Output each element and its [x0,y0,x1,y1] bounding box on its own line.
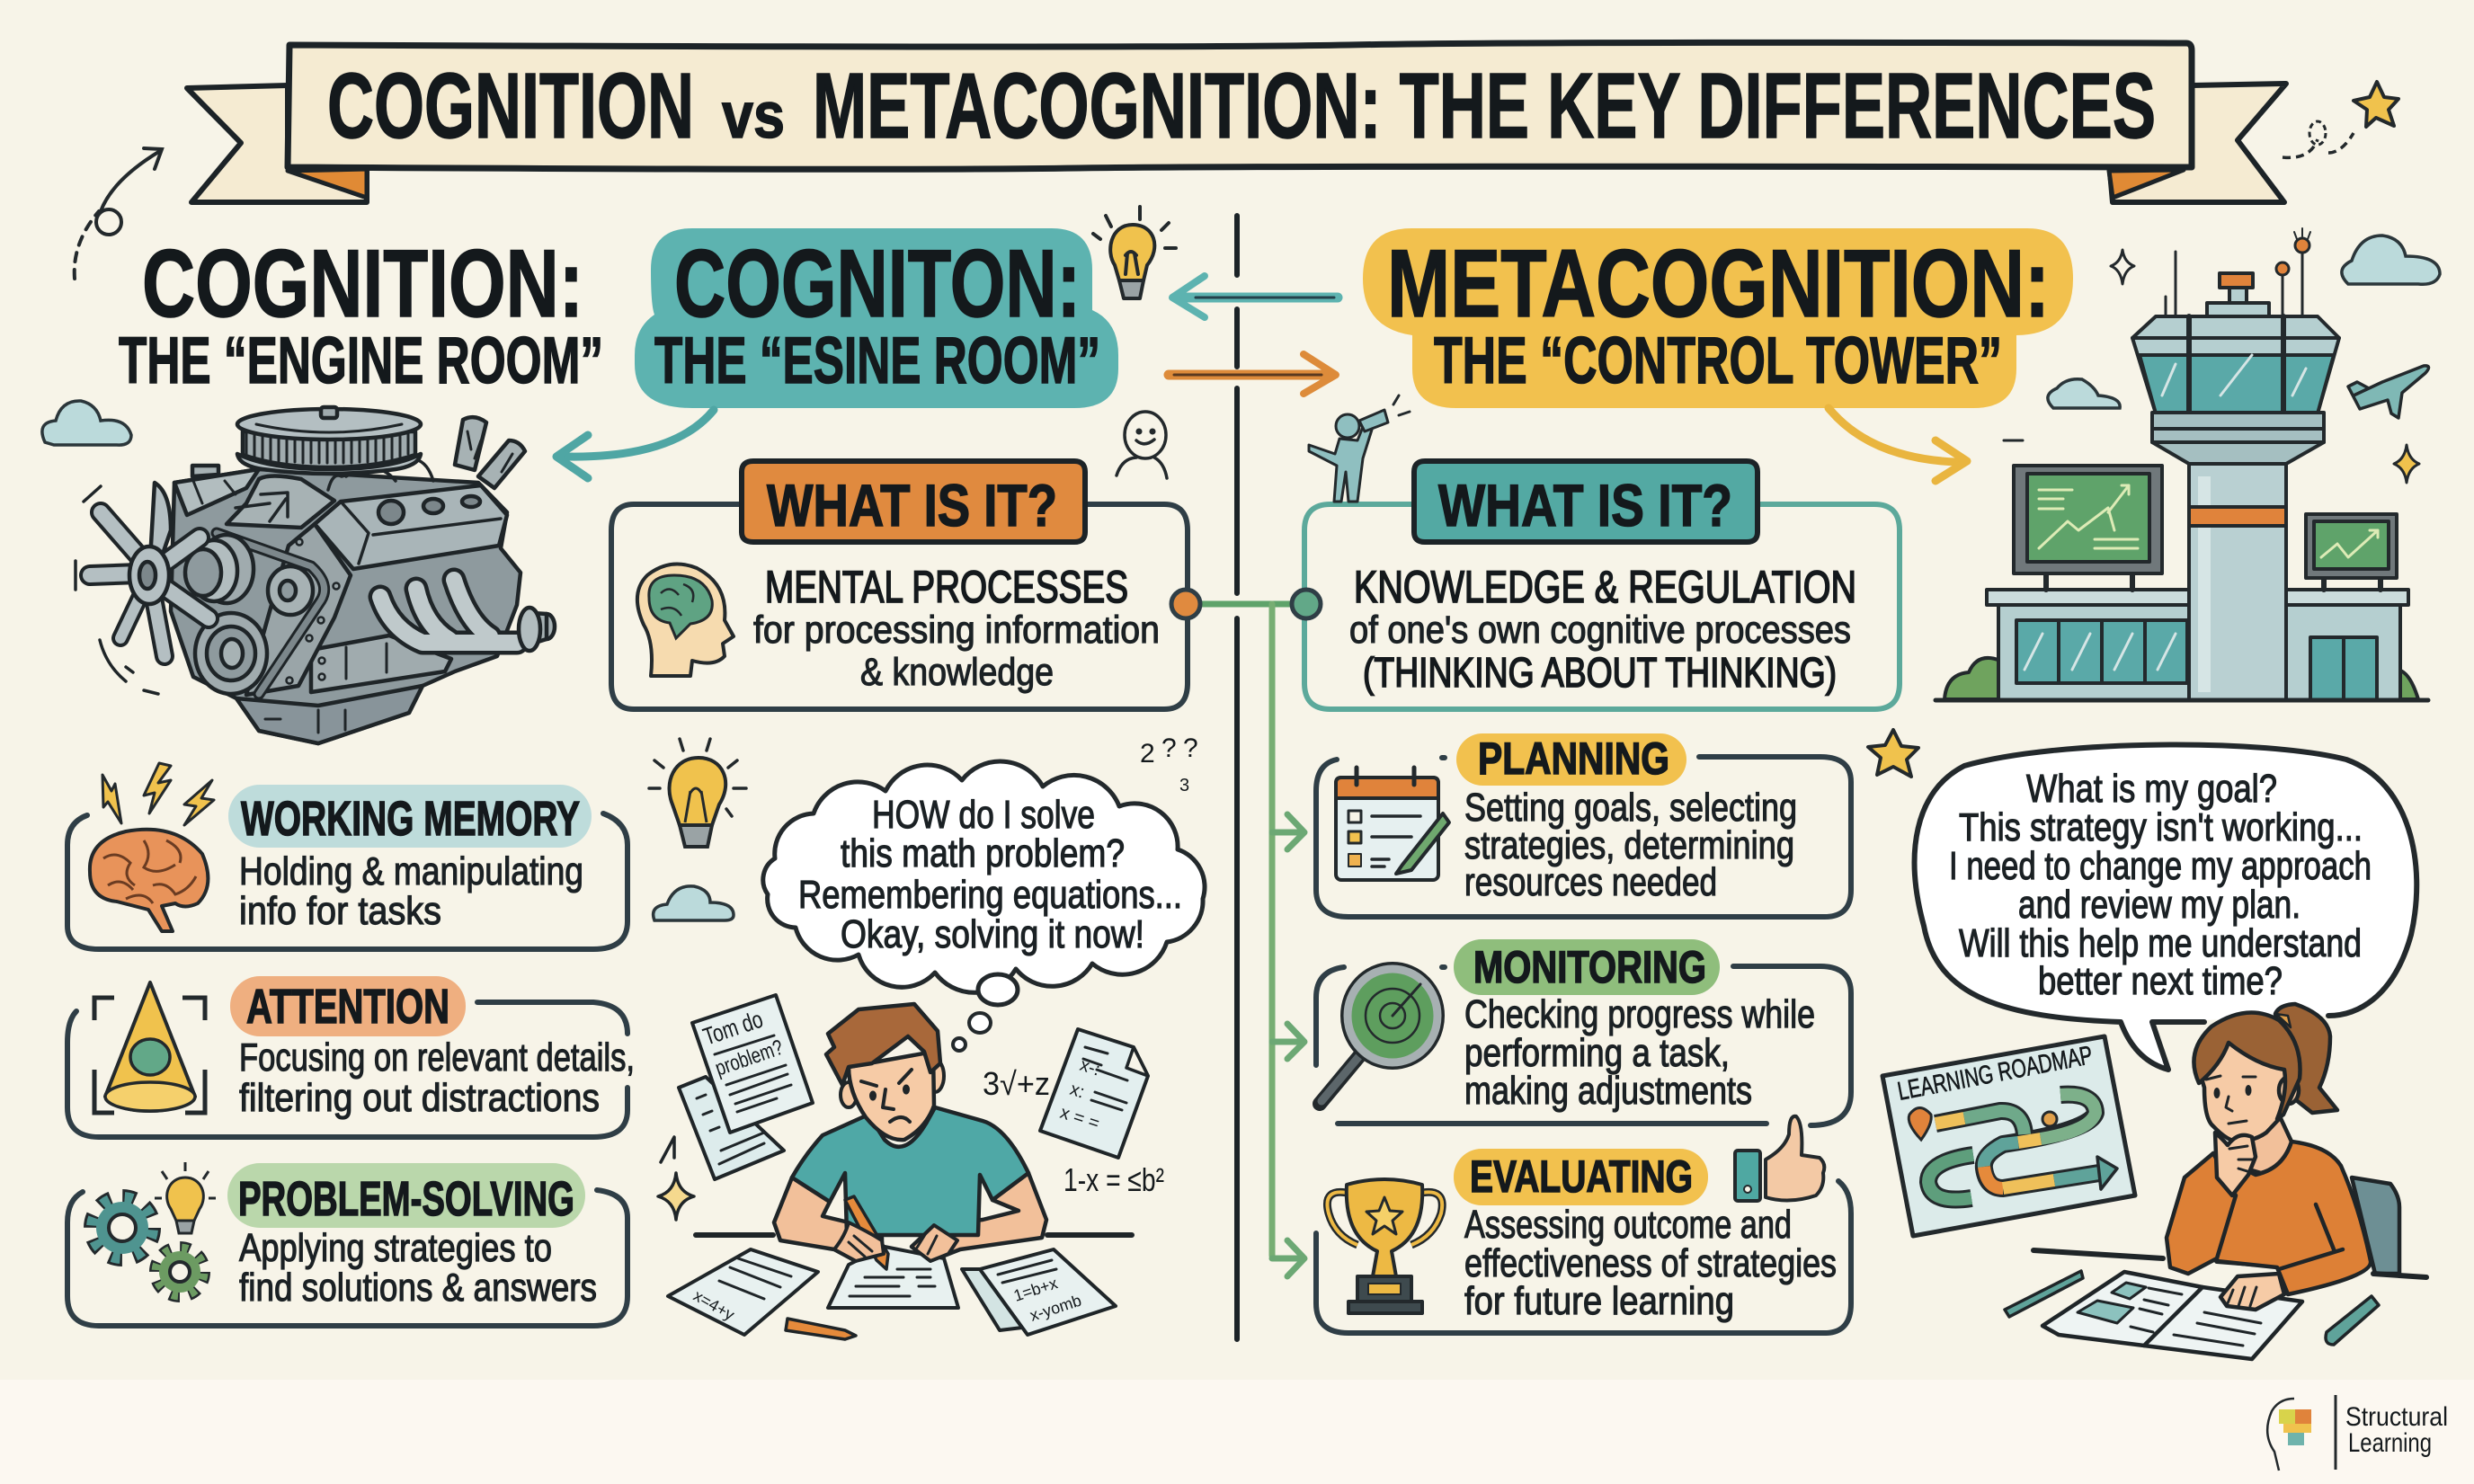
building windows [2016,620,2187,683]
box outline [1316,757,1851,917]
hair [826,1004,940,1085]
text: & knowledge [860,651,1054,694]
antennas [2166,245,2302,320]
callout: thought cloud: Remembering equations... [798,873,1182,917]
equations: 1-x = ≤b² [1063,1161,1164,1198]
box outline [67,1002,627,1137]
small monitor [2324,578,2381,590]
text [1349,562,1856,696]
callout: speech bubble: I need to change my approach [1949,844,2372,888]
writing pencil [845,1196,888,1269]
building [1998,605,2189,700]
cloud: tower small [2048,379,2120,408]
text: resources needed [1464,860,1717,904]
back paper [679,1077,784,1179]
icon: airplane [2348,366,2429,418]
large monitor [2046,573,2132,590]
ribbon tail right [2109,84,2286,202]
front paper: Tom do [699,1006,766,1051]
panel: problem solving [67,1162,627,1326]
logo icon [2267,1399,2311,1471]
title text [327,54,2156,157]
text: for future learning [1464,1279,1734,1323]
text: KNOWLEDGE & REGULATION [1354,562,1856,612]
pill heading: WORKING MEMORY [241,792,580,846]
text: (THINKING ABOUT THINKING) [1363,649,1837,696]
logo: structural learning: Learning [2348,1428,2432,1458]
right paper [1040,1029,1148,1158]
chair [2352,1177,2399,1274]
right paper: x-: [1077,1055,1102,1080]
heading: cognition engine room [119,229,603,397]
face [849,1052,934,1140]
logo: structural learning: Structural [2345,1402,2448,1432]
chin hand [2215,1133,2256,1195]
pencil on desk [786,1319,856,1339]
text: MENTAL PROCESSES [765,562,1128,612]
pill heading: ATTENTION [246,980,449,1034]
text [239,1035,635,1120]
left hand [912,1225,957,1261]
ponytail [2275,1004,2337,1113]
icon: trophy [1327,1179,1442,1313]
pill heading [227,1163,585,1228]
text: making adjustments [1464,1069,1752,1113]
text [239,1226,597,1310]
icon: lightbulb middle [649,739,746,847]
pencils [2005,1271,2083,1317]
text [1464,992,1815,1113]
decoration: looping arrow top left [75,148,162,279]
roadmap path [1928,1095,2099,1200]
panel: attention [67,976,635,1137]
icon: telescope figure [1309,395,1410,502]
text: Assessing outcome and [1464,1203,1792,1247]
text: of one's own cognitive processes [1349,609,1851,652]
alternator [200,535,254,603]
text: Checking progress while [1464,992,1815,1036]
illustration: student reflecting [2005,1004,2426,1359]
logo: structural learning [2267,1395,2448,1471]
bushes [1944,658,2000,699]
fan blades [90,483,209,656]
arrow: orange pointing right [1169,354,1336,394]
tab heading: WHAT IS IT? [1438,472,1732,538]
decoration: star and dashed loop top right [2283,82,2398,157]
serpentine belt [217,533,325,694]
face [2199,1034,2295,1142]
desk line [696,1232,1132,1238]
panel: working memory [67,763,627,949]
panel: what is it metacognition [1304,461,1900,709]
text: Applying strategies to [239,1226,552,1270]
scribbles: question marks [1140,733,1198,795]
panel: planning [1316,733,1851,917]
text: filtering out distractions [239,1076,600,1120]
face features [2213,1088,2220,1098]
desk papers: x=4+y [690,1286,737,1324]
text [239,849,583,933]
text [1464,1203,1837,1323]
icon: calendar checklist [1336,768,1449,880]
desk papers: 1=b+x [1011,1274,1060,1305]
icon: star near speech bubble [1868,730,1918,777]
icon: stick figure [1117,412,1167,478]
cloud: left [42,401,131,445]
front paper [692,995,813,1133]
tower cab [2132,316,2339,413]
icon: gears [92,1197,204,1296]
shirt [792,1107,1028,1235]
neck [2238,1115,2292,1173]
valve cover [315,485,507,569]
pill heading: MONITORING [1473,942,1706,992]
callout: speech bubble: and review my plan. [2018,883,2300,927]
text: for processing information [753,609,1160,652]
ribbon tail left [187,85,367,202]
equations: 3√+z [983,1065,1050,1102]
text: find solutions & answers [239,1266,597,1310]
sparkle and dash [2111,250,2134,284]
box outline [1316,966,1851,1125]
text: strategies, determining [1464,823,1794,867]
book [2042,1272,2302,1359]
ground line [1936,698,2428,703]
callout: thought cloud: this math problem? [841,831,1125,875]
pill heading [230,976,466,1036]
title banner [187,42,2286,202]
air cleaner [237,407,421,474]
text [1464,786,1797,904]
callout: thought cloud [763,761,1205,1051]
panel: evaluating [1316,1116,1851,1333]
callout: speech bubble [1915,745,2416,1070]
crank pulley [195,613,267,694]
arrow: teal pointing left [1172,276,1338,317]
panel: what is it cognition [611,461,1188,709]
engine body [171,469,521,743]
icon: small bulb [155,1162,216,1233]
tab heading: WHAT IS IT? [767,472,1057,538]
icon: brain [90,830,208,931]
icon: head with brain [637,564,734,676]
tower shaft [2189,458,2286,700]
desk papers [668,1247,1116,1335]
icon: attention spotlight cone [94,982,205,1113]
motion marks [76,486,158,694]
exhaust manifold [380,580,517,643]
text: info for tasks [239,889,441,933]
desk [2033,1250,2426,1277]
panel: monitoring [1316,939,1851,1125]
callout: speech bubble: better next time? [2038,959,2283,1003]
right paper: x = = [1057,1103,1102,1134]
text: performing a task, [1464,1031,1730,1075]
sparkle [658,1173,694,1220]
intake [227,476,334,528]
text: effectiveness of strategies [1464,1241,1837,1285]
pill heading: PROBLEM-SOLVING [238,1172,574,1226]
scribbles: question marks: 2 [1140,739,1155,769]
pill heading: EVALUATING [1470,1151,1693,1202]
title text: COGNITION [327,54,694,157]
icon: magnifying glass radar [1320,964,1443,1104]
scribbles: question marks: ? [1183,733,1198,763]
box outline [1304,504,1900,709]
sweater body [2213,1142,2371,1294]
illustration: control tower [1936,228,2428,700]
box outline [67,1190,627,1326]
heading pill: cogniton esine room: COGNITON: [674,229,1081,337]
desk papers: x-yomb [1028,1292,1083,1325]
box outline [1316,1181,1851,1333]
text: Holding & manipulating [239,849,583,893]
right arm [912,1173,1046,1261]
hair [2194,1012,2300,1119]
door [2310,637,2377,700]
bubble fill [1915,745,2416,1070]
face features [861,1070,912,1122]
engine rear pipes [455,417,525,488]
heading pill: cogniton esine room: THE “ESINE ROOM” [654,324,1100,397]
heading: cognition engine room: THE “ENGINE ROOM” [119,324,603,397]
pill heading [228,785,592,848]
tower roof box [2220,273,2253,288]
icon: engine illustration [76,407,555,743]
bubble outline [1915,745,2416,1070]
idler pulley [268,566,313,615]
heading pill: metacognition control tower [1363,228,2073,408]
text: Setting goals, selecting [1464,786,1797,830]
callout: speech bubble: This strategy isn't working... [1959,805,2363,849]
heading pill: cogniton esine room [635,228,1118,408]
heading pill: metacognition control tower: THE “CONTROL TOWER” [1434,324,2002,397]
illustration: student solving problems [658,995,1164,1339]
front paper: problem? [712,1035,787,1081]
illustration: learning roadmap poster: LEARNING ROADMAP [1895,1041,2095,1106]
illustration: learning roadmap poster [1882,1036,2135,1236]
text: Focusing on relevant details, [239,1035,635,1080]
callout: thought cloud: Okay, solving it now! [841,912,1144,956]
connector: green branch to metacognition phases [1171,590,1321,1276]
heading pill: metacognition control tower: METACOGNITION: [1387,229,2050,337]
heading: cognition engine room: COGNITION: [142,229,583,337]
cab collar [2152,413,2324,464]
right ear [926,1060,944,1092]
writing hand [2220,1274,2284,1310]
pill heading: PLANNING [1478,733,1669,784]
right paper: x: [1067,1080,1087,1103]
ribbon main [288,42,2192,169]
icon: lightbulb by heading [1093,207,1176,298]
box outline [67,813,627,949]
callout: thought cloud: HOW do I solve [872,793,1095,837]
callout: speech bubble: What is my goal? [2026,767,2277,811]
cloud: middle small [654,886,734,920]
top left cover and oil cap [192,466,218,476]
writing hand [834,1222,884,1261]
timing cover [246,524,351,695]
icon: thumbs up [1735,1116,1824,1201]
text [753,562,1160,694]
centre divider line [1234,216,1240,1339]
oil pan [236,686,423,743]
left arm [2167,1153,2236,1274]
left arm [774,1177,882,1261]
scribbles: question marks: 3 [1179,776,1189,795]
arrow: teal curve to engine [556,410,714,478]
callout: speech bubble: Will this help me understand [1959,921,2362,965]
scribbles: question marks: ? [1161,733,1177,763]
cloud: tower top right [2342,235,2440,284]
icon: lightning bolts [102,763,214,825]
equations [983,1065,1164,1198]
lower block [311,635,451,692]
arrow: yellow curve to tower [1829,408,1967,481]
left ear [841,1082,857,1107]
title text: vs [722,80,785,152]
ear [2279,1077,2299,1104]
box outline [611,504,1188,709]
